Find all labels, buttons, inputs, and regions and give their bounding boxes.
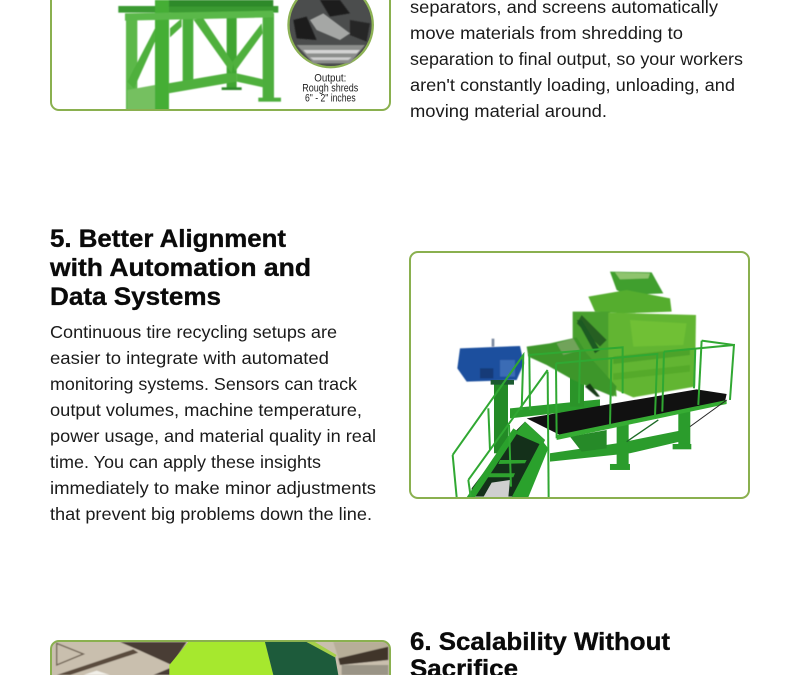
icon: blue motor bbox=[457, 339, 524, 382]
text block: section 4 ending: moving material around. bbox=[410, 101, 607, 121]
text block: section 4 ending bbox=[410, 0, 743, 121]
icon: platform deck bbox=[527, 389, 727, 435]
output caption: 6" - 2" inches bbox=[305, 93, 356, 105]
output caption: Rough shreds bbox=[302, 83, 359, 95]
text block: section 4 ending: move materials from shredding to bbox=[410, 23, 683, 43]
text block: section 5 body bbox=[50, 322, 376, 524]
heading: section 6 bbox=[410, 628, 671, 675]
output caption: Output: bbox=[314, 72, 346, 84]
heading: section 5: with Automation and bbox=[49, 254, 311, 282]
text block: section 4 ending: aren't constantly loading, unloading, and bbox=[410, 75, 735, 95]
text block: section 5 body: that prevent big problems down the line. bbox=[50, 504, 372, 524]
icon: warehouse roof bbox=[50, 640, 390, 675]
text block: section 5 body: Continuous tire recycling setups are bbox=[50, 322, 337, 342]
heading: section 6: 6. Scalability Without bbox=[410, 628, 671, 656]
icon: rubber shreds sample bbox=[287, 0, 374, 68]
text block: section 5 body: time. You can apply these insights bbox=[50, 452, 321, 472]
icon: green wall panel bbox=[265, 642, 338, 675]
text block: section 5 body: monitoring systems. Sensors can track bbox=[50, 374, 357, 394]
panel: factory photo bottom bbox=[50, 640, 390, 675]
panel: green machine photo bbox=[410, 252, 749, 498]
heading: section 5 bbox=[49, 225, 311, 311]
heading: section 5: 5. Better Alignment bbox=[50, 225, 287, 253]
icon: stairs bbox=[467, 422, 548, 497]
text block: section 5 body: power usage, and material quality in real bbox=[50, 426, 376, 446]
text block: section 5 body: immediately to make minor adjustments bbox=[50, 478, 376, 498]
icon: support legs and lower frame bbox=[494, 377, 691, 470]
output caption bbox=[303, 74, 358, 102]
text block: section 5 body: output volumes, machine temperature, bbox=[50, 400, 362, 420]
icon: machine green cover bbox=[169, 642, 273, 675]
heading: section 5: Data Systems bbox=[50, 283, 221, 311]
text block: section 5 body: easier to integrate with automated bbox=[50, 348, 329, 368]
icon: shredder steel frame bbox=[118, 0, 281, 110]
text block: section 4 ending: separation to final output, so your workers bbox=[410, 49, 743, 69]
icon: safety railings bbox=[453, 341, 734, 497]
panel: shredder photo top left bbox=[51, 0, 390, 110]
icon: shredder body bbox=[527, 272, 696, 397]
